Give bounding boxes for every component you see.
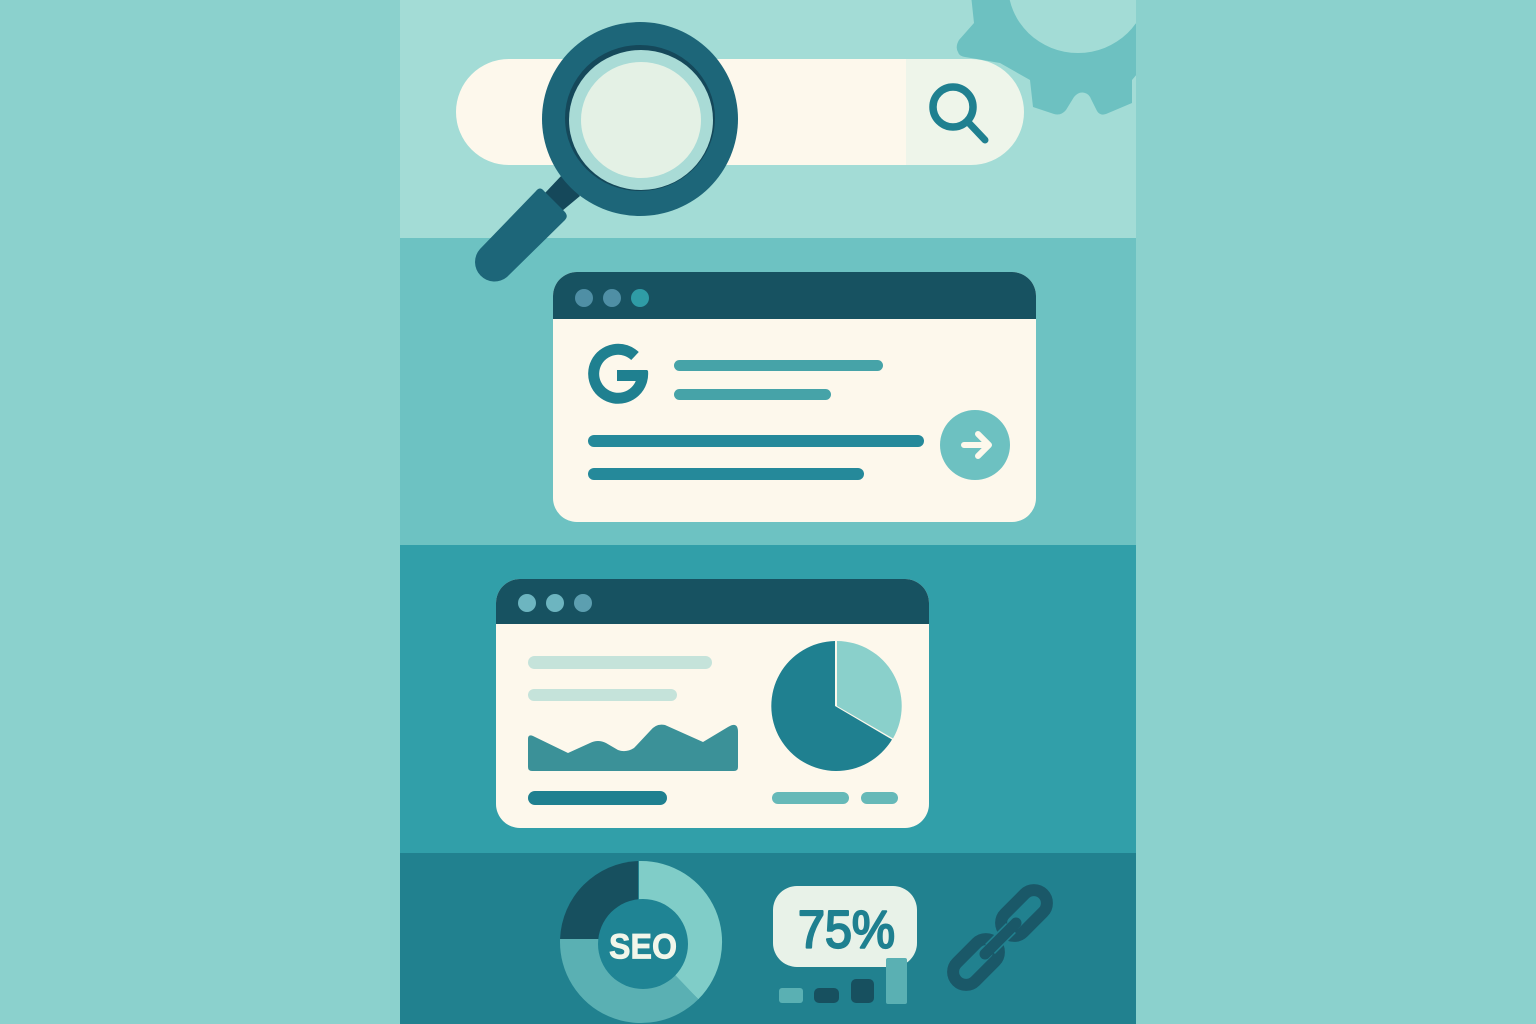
panel: search results band [400, 238, 1136, 545]
bar chart [779, 958, 907, 1004]
stat badge: 75% [773, 886, 917, 967]
icon: chain link [948, 885, 1052, 990]
search bar [456, 59, 1024, 165]
icon: magnifying glass [475, 22, 738, 282]
browser card: analytics [496, 579, 929, 828]
donut chart: SEO: SEO [609, 928, 677, 966]
area chart [528, 725, 738, 771]
panel: search band [400, 0, 1148, 238]
panel: metrics band [400, 853, 1136, 1024]
icon: small search [933, 87, 985, 140]
icon: arrow button [940, 410, 1010, 480]
icon: G logo [594, 349, 647, 398]
infographic canvas [400, 0, 1136, 1024]
pie chart [771, 641, 902, 771]
icon: gear [957, 0, 1148, 115]
browser card: search result [553, 272, 1036, 522]
donut chart: SEO [560, 861, 722, 1023]
stat badge: 75%: 75% [798, 900, 895, 960]
panel: analytics band [400, 545, 1136, 853]
